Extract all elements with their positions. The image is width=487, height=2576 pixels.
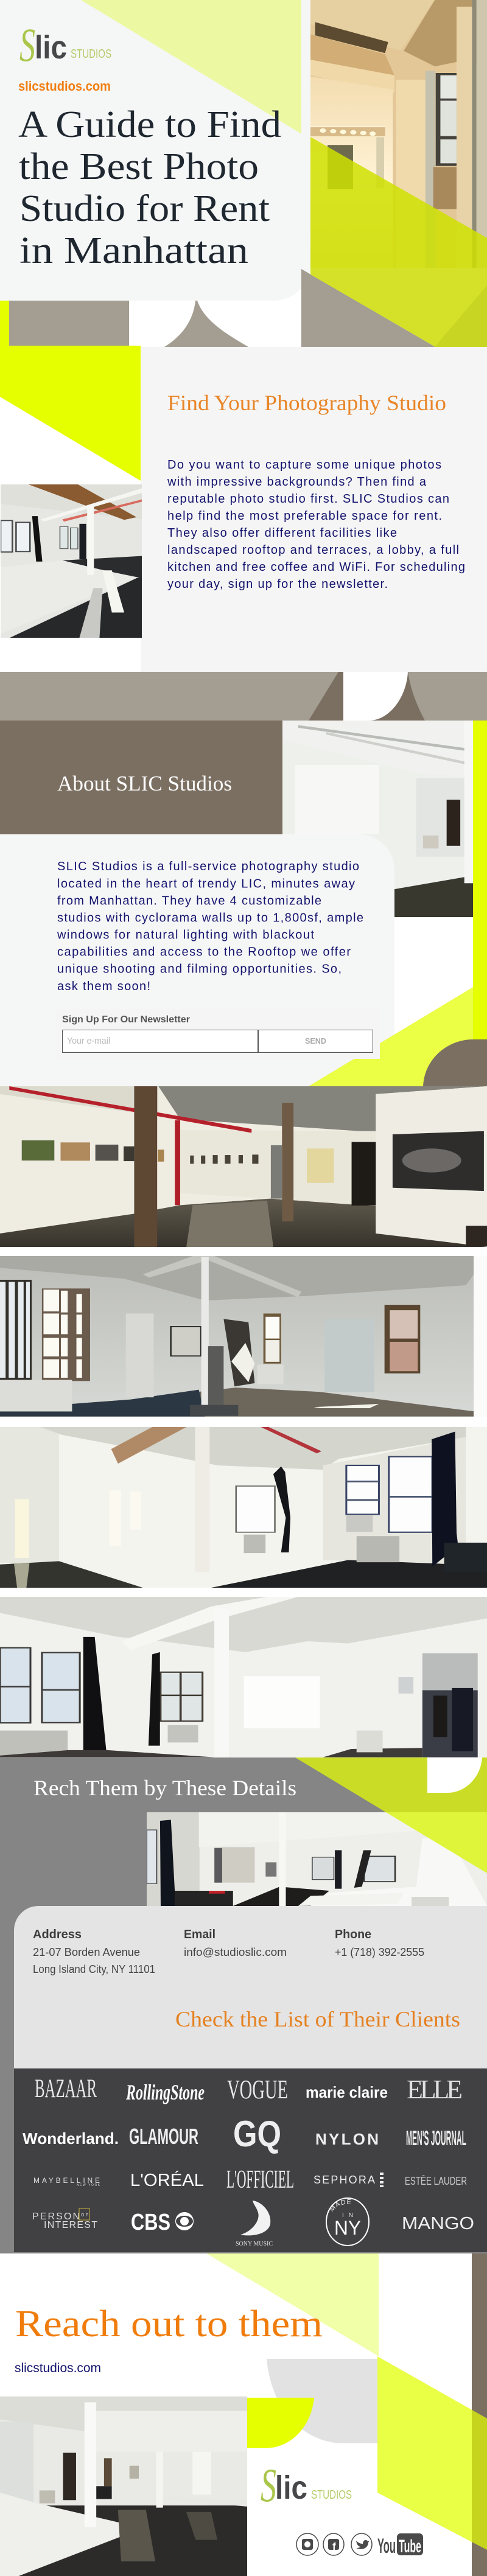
- body paragraph: kitchen and free coffee and WiFi. For scheduling: [167, 560, 465, 574]
- logo row 4: PERSON: [32, 2211, 80, 2222]
- brown triangle: [309, 672, 343, 721]
- lime diagonal over photo: [386, 1812, 487, 1873]
- yellow block: [0, 346, 141, 481]
- body paragraph: unique shooting and filming opportunities. So,: [57, 963, 342, 976]
- yellow curved shape: [247, 2398, 314, 2448]
- heading: Reach out to them: [15, 2303, 323, 2345]
- grey strip: [9, 301, 129, 347]
- brown corner shape: [423, 1039, 487, 1086]
- body paragraph: reputable photo studio first. SLIC Studios can: [167, 492, 449, 506]
- website link: slicstudios.com: [15, 2361, 101, 2375]
- logo: slic studios: lic: [275, 2470, 307, 2506]
- body paragraph: capabilities and access to the Rooftop we offer: [57, 946, 351, 959]
- social icons: [296, 2533, 423, 2558]
- yellow strip: [0, 301, 9, 347]
- heading: clients: Check the List of Their Clients: [175, 2007, 460, 2031]
- panel: about slic studios: [0, 672, 487, 1086]
- details card: [14, 1906, 487, 2068]
- logo row 3: [33, 2166, 467, 2194]
- logo: slic studios: [261, 2459, 352, 2511]
- dark lime band on bar: [472, 2410, 487, 2550]
- panel: find your photography studio: [0, 346, 487, 672]
- column: address: Address: [33, 1928, 82, 1941]
- lime band: [377, 2356, 472, 2542]
- photo: studio with window and vanity lights: [310, 0, 487, 268]
- logo row 3: ESTĒE LAUDER: [405, 2175, 467, 2187]
- logo: slic studios: S: [19, 18, 35, 71]
- logo row 3: L'ORÉAL: [130, 2170, 204, 2190]
- logo row 4: NY: [334, 2217, 361, 2239]
- logo row 1: [35, 2075, 463, 2104]
- body paragraph: [57, 860, 363, 993]
- column: phone: Phone: [335, 1928, 371, 1941]
- brown side bar: [472, 2253, 487, 2576]
- panel: footer reach out: [0, 2253, 487, 2576]
- logo: slic studios: S: [261, 2459, 276, 2511]
- heading: About SLIC Studios: [57, 772, 232, 795]
- logo: slic studios: STUDIOS: [71, 47, 111, 61]
- text card: [0, 834, 394, 1086]
- body paragraph: help find the most preferable space for rent.: [167, 509, 442, 523]
- body paragraph: your day, sign up for the newsletter.: [167, 578, 388, 591]
- lime diagonal below photo: [310, 268, 487, 347]
- icon: youtube: Tube: [399, 2536, 421, 2557]
- logo row 2: Wonderland.: [23, 2129, 119, 2148]
- logo row 1: ELLE: [407, 2075, 463, 2104]
- yellow bar: [473, 721, 487, 1039]
- column: address: [33, 1928, 155, 1975]
- newsletter form: [56, 1009, 380, 1059]
- logo row 2: [23, 2114, 466, 2154]
- photo: brick studio with windows and column: [0, 1256, 474, 1417]
- grey curved shape: [267, 2359, 377, 2443]
- icon: youtube: You: [377, 2535, 396, 2558]
- panel: client logos: [14, 2068, 487, 2252]
- logo row 2: GQ: [233, 2114, 281, 2154]
- logo row 3: NEW YORK: [77, 2183, 100, 2187]
- heading: Rech Them by These Details: [33, 1776, 296, 1800]
- newsletter form: SEND: [305, 1036, 326, 1045]
- lime diagonal overlay on photo: [310, 137, 487, 268]
- body paragraph: [167, 458, 465, 591]
- lime diagonal: [309, 987, 473, 1086]
- body paragraph: from Manhattan. They have 4 customizable: [57, 895, 321, 908]
- icon: instagram: [296, 2533, 318, 2555]
- section heading: Find Your Photography Studio: [167, 391, 446, 415]
- body paragraph: landscaped rooftop and terraces, a lobby, a full: [167, 543, 459, 557]
- logo: slic studios: lic: [35, 29, 67, 66]
- logo row 4: MANGO: [402, 2214, 474, 2233]
- logo row 1: VOGUE: [227, 2075, 288, 2104]
- logo row 4: CBS: [131, 2210, 170, 2235]
- logo row 3: L'OFFICIEL: [226, 2166, 294, 2194]
- icon: twitter: [351, 2533, 372, 2555]
- body paragraph: windows for natural lighting with blackout: [57, 928, 314, 941]
- website link: slicstudios.com: [18, 79, 111, 94]
- body paragraph: Do you want to capture some unique photos: [167, 458, 441, 472]
- logo: slic studios: [19, 18, 111, 71]
- logo row 4: OF: [81, 2213, 88, 2218]
- body paragraph: They also offer different facilities like: [167, 526, 397, 540]
- title: in Manhattan: [19, 230, 248, 271]
- photo: gallery with wooden pillars and red pipe: [0, 1086, 487, 1247]
- logo row 1: RollingStone: [125, 2080, 205, 2104]
- photo: studio with black sofa: [147, 1812, 487, 1906]
- column: address: 21-07 Borden Avenue: [33, 1946, 140, 1958]
- column: email: [184, 1928, 287, 1958]
- lime triangle: [295, 1757, 487, 1812]
- photo: white studio with polished floor: [0, 2396, 247, 2576]
- column: email: Email: [184, 1928, 215, 1941]
- bottom grey block: [301, 269, 435, 347]
- body paragraph: with impressive backgrounds? Then find a: [167, 475, 427, 489]
- title: A Guide to Find: [18, 104, 281, 145]
- column: address: Long Island City, NY 11101: [33, 1963, 155, 1975]
- logo row 1: marie claire: [306, 2083, 388, 2101]
- panel: hero: [0, 0, 487, 347]
- logo: slic studios: STUDIOS: [311, 2488, 352, 2502]
- pale lime triangle: [81, 0, 301, 134]
- logo row 4: IN: [342, 2212, 353, 2219]
- title: the Best Photo: [19, 146, 259, 187]
- logo row 3: MAYBELLINE: [33, 2176, 100, 2185]
- icon: facebook: [323, 2533, 344, 2555]
- column: phone: +1 (718) 392-2555: [335, 1946, 424, 1958]
- photo: white cyclorama with wood beam and curtains: [0, 1427, 487, 1588]
- white curved block: [343, 672, 408, 721]
- panel: contact details: [0, 1757, 487, 2253]
- body paragraph: studios with cyclorama walls up to 1,800sf, ample: [57, 912, 363, 925]
- newsletter form: Your e-mail: [67, 1036, 110, 1046]
- hero text card: [0, 0, 310, 301]
- photo: white wall and doorway: [282, 721, 473, 917]
- logo row 4: SONY MUSIC: [236, 2241, 273, 2247]
- grey peak shape: [164, 301, 248, 347]
- white curved shape: [427, 1757, 482, 1793]
- darker lime corner: [435, 285, 487, 347]
- body paragraph: ask them soon!: [57, 980, 150, 993]
- title: Studio for Rent: [19, 188, 270, 229]
- logo row 4: INTEREST: [44, 2220, 97, 2230]
- body paragraph: SLIC Studios is a full-service photography studio: [57, 860, 359, 873]
- grey background: [0, 1757, 487, 2253]
- column: phone: [335, 1928, 424, 1958]
- logo row 4: MADE: [329, 2199, 351, 2211]
- heading box: [0, 721, 282, 834]
- photo: white cyclorama studio: [1, 484, 142, 638]
- logo row 3: SEPHORA: [314, 2174, 375, 2186]
- pale lime triangle: [206, 2253, 379, 2356]
- logo row 2: NYLON: [315, 2130, 379, 2148]
- newsletter form: Sign Up For Our Newsletter: [62, 1014, 190, 1025]
- photo: white studio with black curtains and doorway: [0, 1597, 487, 1757]
- logo row 1: BAZAAR: [35, 2075, 97, 2103]
- column: email: info@studioslic.com: [184, 1946, 287, 1958]
- icon: facebook: f: [332, 2541, 336, 2552]
- logo row 2: GLAMOUR: [129, 2124, 198, 2149]
- text panel: [141, 347, 487, 672]
- body paragraph: located in the heart of trendy LIC, minutes away: [57, 878, 355, 891]
- brown peak: [368, 672, 425, 721]
- logo row 4: [32, 2197, 474, 2247]
- grey band: [0, 672, 487, 721]
- title: [18, 104, 281, 271]
